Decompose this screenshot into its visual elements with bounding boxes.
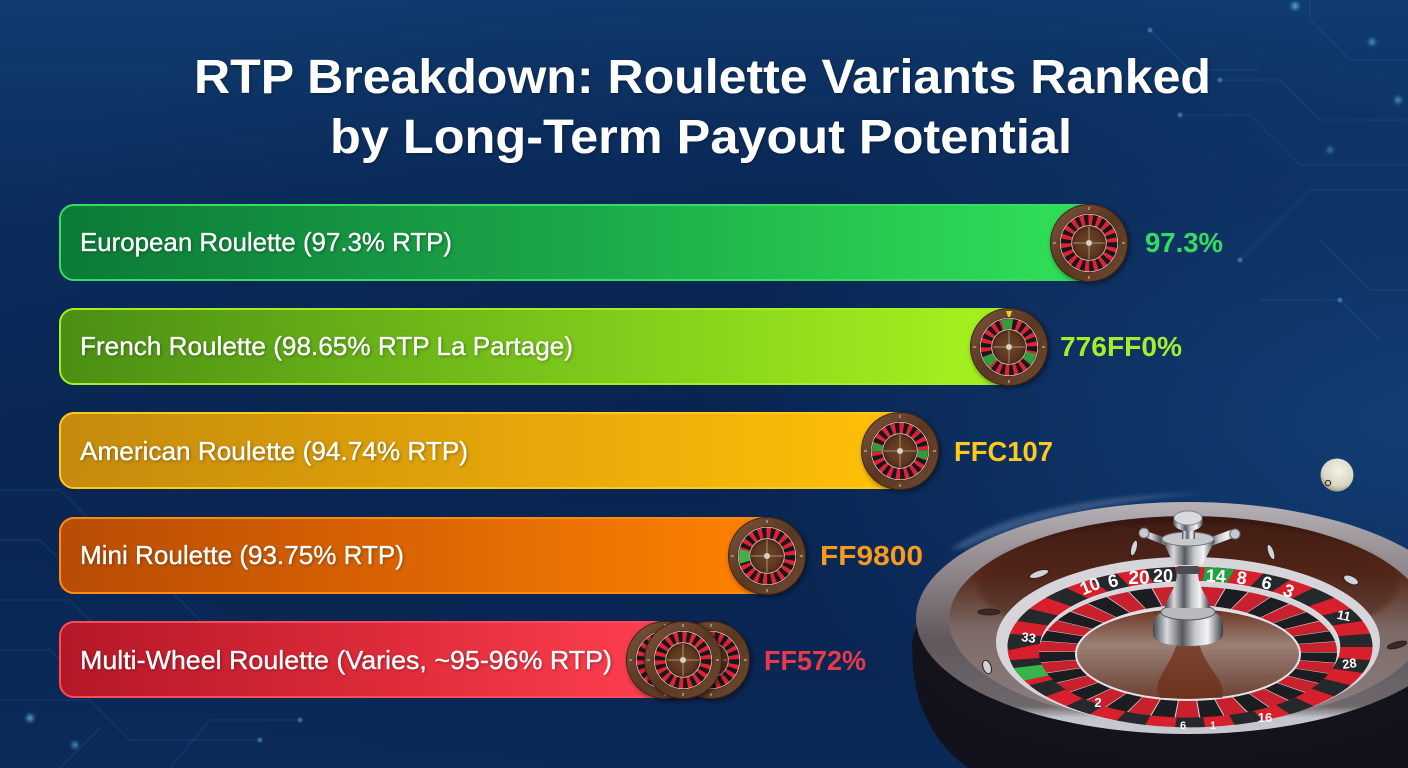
pocket numbers: 14 [1205, 565, 1226, 587]
pocket numbers: 16 [1258, 710, 1272, 725]
motion swoosh [950, 493, 1210, 550]
value: Multi-Wheel: FF572% [764, 645, 866, 676]
wheel base [912, 600, 1408, 768]
value: European: 97.3% [1145, 227, 1223, 258]
pocket numbers: 6 [1180, 720, 1186, 732]
pocket numbers: 20 [1153, 566, 1173, 586]
title [194, 51, 1211, 164]
pocket numbers: 8 [1236, 567, 1248, 589]
value: French: 776FF0% [1060, 331, 1182, 362]
label: Multi-Wheel Roulette: Multi-Wheel Roulette (Varies, ~95-96% RTP) [80, 645, 612, 675]
label: French Roulette: French Roulette (98.65% RTP La Partage) [80, 331, 573, 361]
icon: French wheel [970, 308, 1048, 386]
label: Mini Roulette: Mini Roulette (93.75% RTP) [80, 540, 404, 570]
label: European Roulette: European Roulette (97.3% RTP) [80, 227, 452, 257]
pocket numbers: 28 [1341, 655, 1358, 672]
pocket numbers [1020, 565, 1358, 732]
title: by Long-Term Payout Potential [330, 111, 1072, 164]
studs [978, 539, 1407, 675]
value: American: FFC107 [954, 436, 1053, 467]
pocket numbers: 3 [1280, 580, 1297, 602]
icon: three stacked wheels [626, 622, 750, 698]
pocket numbers: 20 [1128, 568, 1150, 589]
pocket numbers: 6 [1259, 572, 1274, 594]
bar: Mini Roulette [60, 518, 775, 593]
pocket numbers: 2 [1094, 695, 1102, 710]
silver turret [1139, 511, 1240, 646]
icon: European wheel [1050, 204, 1128, 282]
value: Mini: FF9800 [820, 540, 923, 571]
silver ring [996, 557, 1380, 727]
icon: Mini wheel [728, 518, 806, 594]
icon: American wheel [862, 412, 938, 490]
bar: Multi-Wheel Roulette [60, 622, 670, 697]
pocket ring [1060, 596, 1316, 708]
bar: American Roulette [60, 413, 910, 488]
bar: French Roulette [60, 309, 1020, 384]
number ring [1024, 574, 1356, 720]
title: RTP Breakdown: Roulette Variants Ranked [194, 51, 1211, 104]
large roulette wheel [912, 493, 1408, 768]
outer rim [916, 502, 1408, 734]
pocket numbers: 33 [1020, 629, 1037, 646]
bar: European Roulette [60, 205, 1100, 280]
wheel cone [1076, 608, 1300, 700]
wooden bowl [949, 516, 1408, 724]
label: American Roulette: American Roulette (94.74% RTP) [80, 436, 468, 466]
pocket numbers: 1 [1210, 720, 1216, 732]
pocket numbers: 10 [1077, 573, 1103, 599]
icon: ivory ball [1320, 458, 1354, 492]
pocket numbers: 11 [1336, 607, 1352, 624]
pocket numbers: 6 [1106, 570, 1120, 592]
